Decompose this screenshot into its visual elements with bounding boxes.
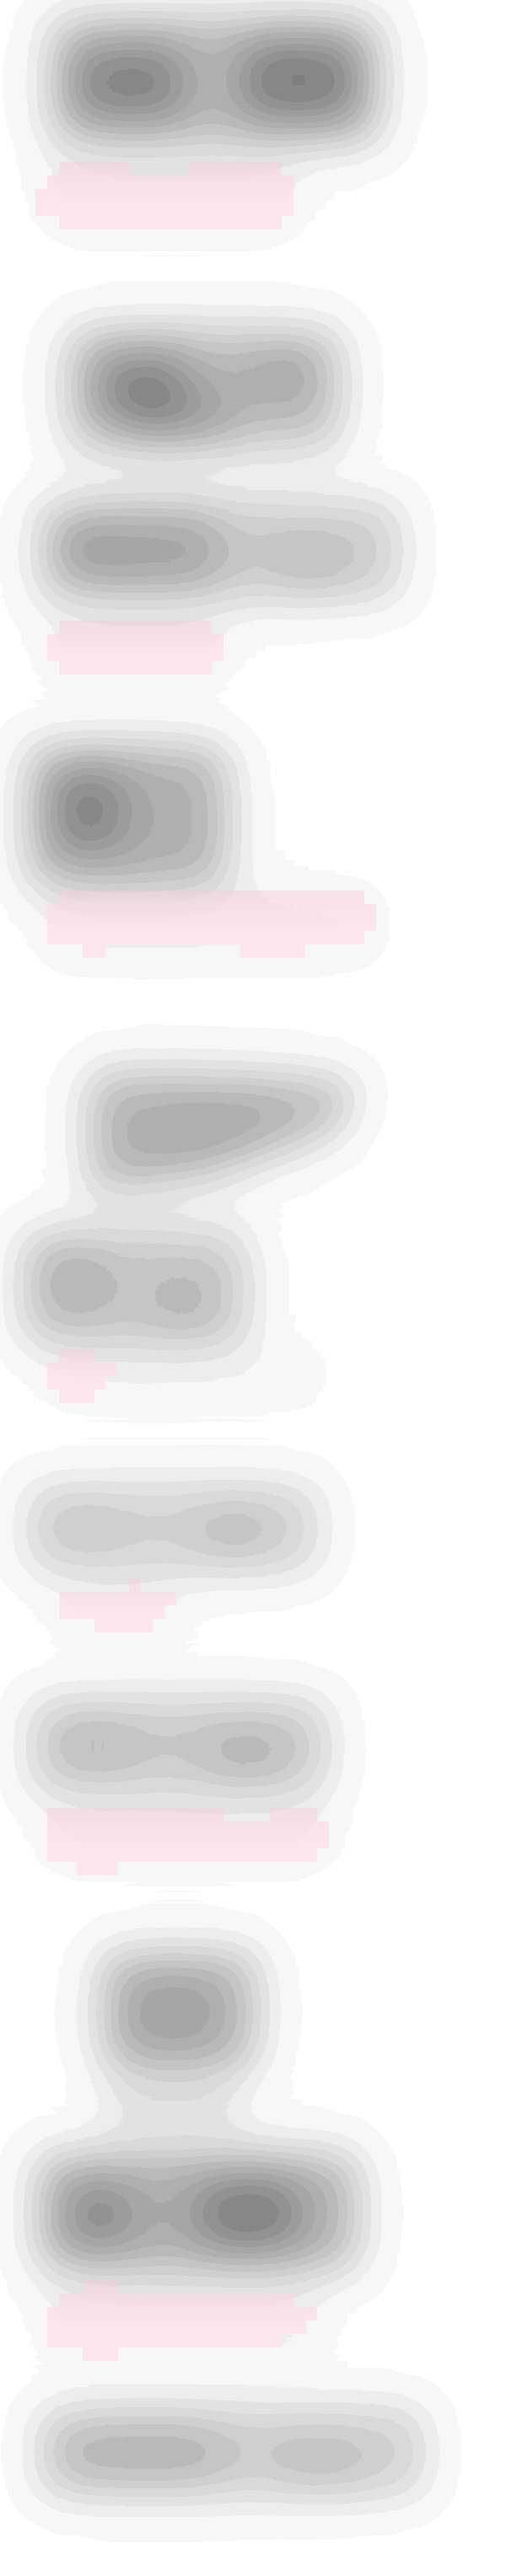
pink highlight band 5 — [59, 1578, 176, 1632]
pink highlight band 6 — [47, 1808, 329, 1875]
blurred text row 7 — [25, 1484, 320, 1632]
blurred text row 8 — [30, 1699, 329, 1862]
blurred text row 4 — [30, 746, 376, 958]
blurred text row 11 — [38, 2407, 426, 2496]
pink highlight band 3 — [47, 890, 376, 958]
blurred text row 5 — [89, 1071, 358, 1193]
blurred text row 10 — [38, 2154, 358, 2356]
blurred text row 6 — [21, 1231, 326, 1403]
pink highlight band 2 — [47, 621, 223, 675]
pink highlight band 7 — [47, 2280, 317, 2361]
pink highlight band 4 — [47, 1349, 117, 1403]
blurred text row 3 — [38, 502, 401, 675]
blurred text row 9 — [101, 1952, 257, 2133]
blurred text row 2 — [67, 329, 342, 447]
blurred text row 1 — [47, 17, 380, 229]
pink highlight band 1 — [35, 162, 293, 229]
